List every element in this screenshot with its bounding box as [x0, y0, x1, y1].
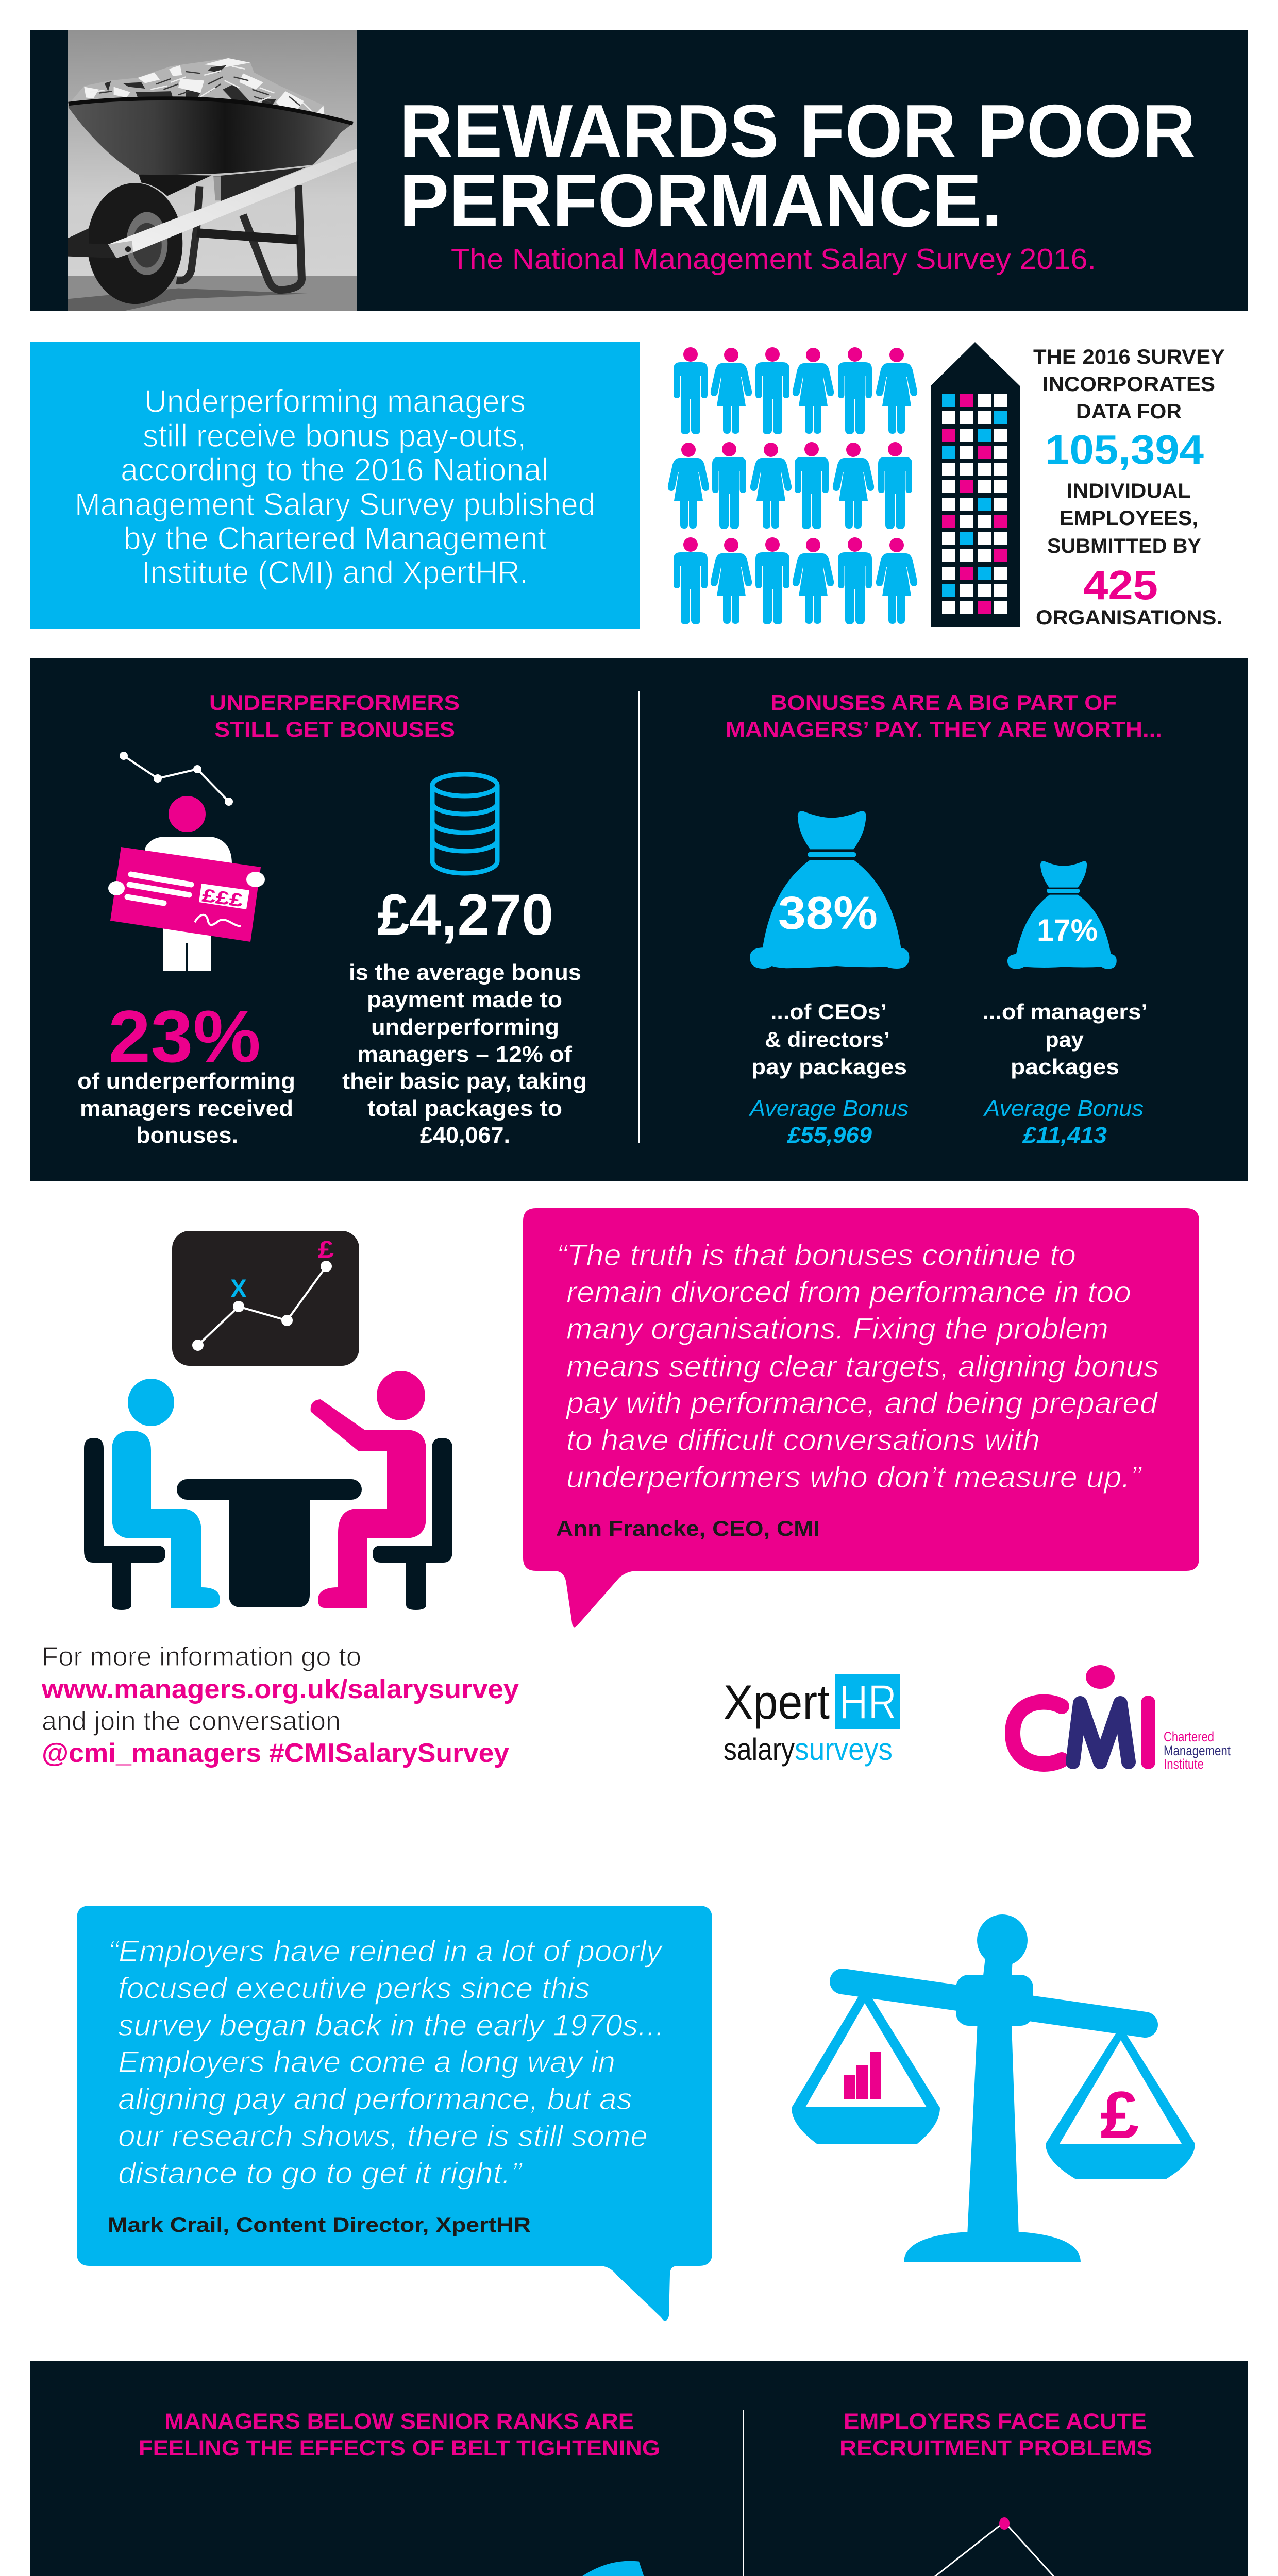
logo: XpertHR salary surveys: Xpert	[724, 1675, 830, 1729]
label: CEOs and directors: & directors’	[765, 1027, 890, 1052]
text block: survey statistics: THE 2016 SURVEY	[1033, 346, 1225, 368]
icon: balance scales: £	[1100, 2077, 1139, 2153]
label: managers	[982, 999, 1148, 1148]
heading: belt tightening	[139, 2409, 660, 2461]
title	[399, 89, 1196, 242]
stat: £4,270	[342, 883, 587, 1148]
label: managers: packages	[1011, 1055, 1119, 1079]
logo: CMI	[1013, 1665, 1231, 1772]
stat: 23%: of underperforming	[77, 1069, 295, 1094]
callout: Mark Crail quote: Mark Crail, Content Director, XpertHR	[108, 2214, 531, 2236]
label: CEOs and directors	[748, 999, 909, 1148]
heading: bonuses are a big part	[726, 690, 1162, 741]
panel: intro text: still receive bonus pay-outs,	[143, 418, 526, 454]
panel: intro text: according to the 2016 National	[121, 452, 548, 488]
text block: more information	[41, 1642, 519, 1768]
text block: survey statistics	[1033, 346, 1225, 629]
text block: more information: For more information go to	[42, 1642, 361, 1672]
callout: Mark Crail quote: survey began back in the early 1970s...	[118, 2009, 664, 2042]
icon: person holding cheque: £££	[200, 885, 244, 911]
callout: Ann Francke quote: to have difficult conversations with	[566, 1423, 1040, 1457]
callout: Mark Crail quote: our research shows, there is still some	[118, 2120, 648, 2153]
photo: wheelbarrow full of money	[68, 30, 357, 311]
stat: £4,270: payment made to	[367, 987, 562, 1012]
panel: header banner	[30, 30, 1248, 311]
text block: survey statistics: INDIVIDUAL	[1067, 480, 1191, 502]
text block: survey statistics: INCORPORATES	[1042, 373, 1215, 396]
heading: underperformers still get bonuses: UNDERPERFORMERS	[209, 690, 460, 715]
logo: XpertHR salary surveys: salary	[724, 1732, 795, 1767]
chart board: £	[318, 1236, 334, 1263]
text block: survey statistics: 425	[1083, 562, 1158, 608]
text block: more information: and join the conversation	[42, 1706, 341, 1736]
panel: intro text: Underperforming managers	[144, 384, 526, 419]
heading: belt tightening: FEELING THE EFFECTS OF BELT TIGHTENING	[139, 2436, 660, 2461]
stat: 23%	[77, 996, 295, 1148]
callout: Mark Crail quote: focused executive perks since this	[118, 1972, 590, 2005]
panel: belt tightening, recruitment and skills	[30, 2361, 1248, 2576]
panel: intro text: Management Salary Survey published	[75, 487, 595, 522]
heading: recruitment problems	[839, 2409, 1152, 2461]
title: PERFORMANCE.	[399, 159, 1002, 242]
subtitle: The National Management Salary Survey 2016.	[451, 243, 1096, 276]
stat: 23%: managers received	[80, 1096, 293, 1121]
icon: office building	[931, 342, 1020, 627]
text block: more information: www.managers.org.uk/salarysurvey	[41, 1674, 519, 1704]
chart board	[172, 1231, 359, 1366]
panel: intro text	[30, 342, 640, 629]
icon: large money bag: 38%	[778, 888, 878, 939]
stat: 23%: 23%	[108, 996, 261, 1078]
callout: Ann Francke quote: Ann Francke, CEO, CMI	[556, 1516, 820, 1540]
stat: £4,270: £4,270	[377, 883, 553, 947]
logo: CMI: Chartered	[1164, 1729, 1214, 1744]
logo: CMI: Institute	[1164, 1756, 1204, 1772]
callout: Mark Crail quote	[77, 1906, 712, 2321]
callout: Ann Francke quote: means setting clear targets, aligning bonus	[566, 1350, 1159, 1383]
icon: balance scales	[792, 1914, 1195, 2262]
callout: Ann Francke quote: remain divorced from performance in too	[566, 1276, 1131, 1309]
icon: banknotes	[445, 2561, 668, 2576]
callout: Ann Francke quote: pay with performance, and being prepared	[565, 1386, 1158, 1420]
panel: intro text: Institute (CMI) and XpertHR.	[142, 555, 528, 590]
icon: person holding cheque	[108, 752, 265, 971]
callout: Ann Francke quote	[523, 1208, 1199, 1628]
icon: small money bag: 17%	[1037, 913, 1098, 947]
logo: CMI: Management	[1164, 1743, 1231, 1758]
heading: underperformers still get bonuses	[209, 690, 460, 741]
label: CEOs and directors: pay packages	[751, 1055, 907, 1079]
title: REWARDS FOR POOR	[399, 89, 1196, 173]
callout: Mark Crail quote: aligning pay and performance, but as	[118, 2082, 632, 2116]
heading: underperformers still get bonuses: STILL GET BONUSES	[214, 717, 455, 741]
stat: £4,270: £40,067.	[420, 1123, 510, 1148]
callout: Mark Crail quote: Employers have come a long way in	[118, 2045, 615, 2079]
stat: £4,270: their basic pay, taking	[342, 1069, 587, 1094]
label: managers: £11,413	[1022, 1123, 1107, 1148]
label: managers: pay	[1045, 1027, 1084, 1052]
text block: survey statistics: SUBMITTED BY	[1047, 535, 1201, 557]
logo: XpertHR salary surveys: HR	[839, 1675, 897, 1729]
heading: bonuses are a big part: BONUSES ARE A BIG PART OF	[770, 690, 1117, 715]
callout: Mark Crail quote: distance to go to get it right.”	[118, 2157, 523, 2190]
icon: meeting with performance chart	[84, 1231, 452, 1610]
text block: survey statistics: DATA FOR	[1076, 400, 1182, 423]
text block: survey statistics: ORGANISATIONS.	[1036, 606, 1222, 629]
stat: £4,270: total packages to	[367, 1096, 562, 1121]
callout: Ann Francke quote: “The truth is that bonuses continue to	[557, 1239, 1076, 1272]
label: CEOs and directors: ...of CEOs’	[770, 999, 887, 1024]
label: CEOs and directors: £55,969	[786, 1123, 872, 1148]
icon: large money bag	[750, 811, 909, 969]
icon: grid of employees	[668, 347, 917, 624]
text block: more information: @cmi_managers #CMISalarySurvey	[42, 1738, 509, 1768]
logo: XpertHR salary surveys: surveys	[795, 1732, 893, 1767]
label: managers: ...of managers’	[982, 999, 1148, 1024]
panel: intro text: by the Chartered Management	[124, 521, 546, 556]
callout: Mark Crail quote: “Employers have reined in a lot of poorly	[108, 1935, 663, 1968]
heading: belt tightening: MANAGERS BELOW SENIOR RANKS ARE	[164, 2409, 634, 2434]
text block: survey statistics: 105,394	[1045, 427, 1204, 472]
callout: Ann Francke quote: underperformers who don’t measure up.”	[566, 1461, 1142, 1494]
stat: £4,270: underperforming	[371, 1014, 559, 1040]
icon: coin stack	[432, 774, 497, 873]
callout: Ann Francke quote: many organisations. Fixing the problem	[566, 1312, 1108, 1346]
stat: 23%: bonuses.	[136, 1123, 238, 1148]
stat: £4,270: is the average bonus	[349, 960, 581, 985]
heading: bonuses are a big part: MANAGERS’ PAY. THEY ARE WORTH...	[726, 717, 1162, 741]
chart board: X	[230, 1274, 247, 1303]
icon: small money bag	[1007, 861, 1117, 969]
label: CEOs and directors: Average Bonus	[748, 1096, 909, 1121]
text block: survey statistics: EMPLOYEES,	[1060, 507, 1198, 530]
heading: recruitment problems: RECRUITMENT PROBLEMS	[839, 2436, 1152, 2461]
logo: XpertHR salary surveys	[724, 1674, 900, 1767]
icon: vacancy sign	[845, 2517, 1145, 2576]
panel: underperformers and bonuses	[30, 658, 1248, 1181]
stat: £4,270: managers – 12% of	[357, 1042, 572, 1067]
heading: recruitment problems: EMPLOYERS FACE ACUTE	[844, 2409, 1147, 2434]
label: managers: Average Bonus	[983, 1096, 1144, 1121]
